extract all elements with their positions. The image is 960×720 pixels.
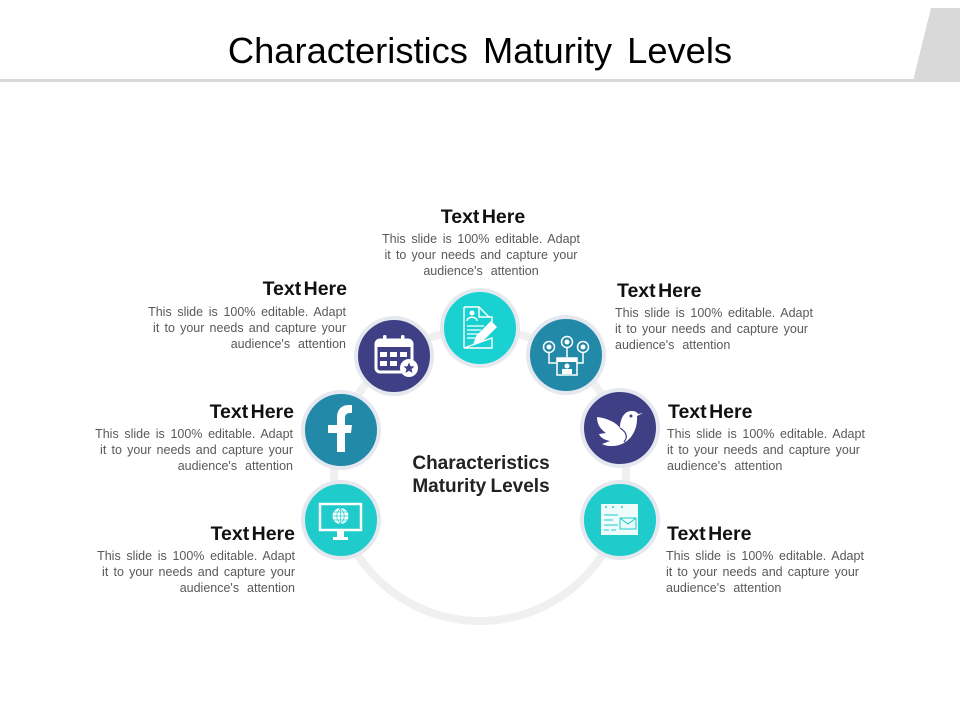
node: facebook bbox=[303, 392, 379, 468]
text: This slide is 100% editable. Adapt bbox=[666, 549, 864, 563]
text: Text Here bbox=[668, 401, 752, 423]
center label: Characteristics bbox=[412, 453, 550, 474]
text: it to your needs and capture your bbox=[102, 565, 295, 579]
text: audience's attention bbox=[178, 459, 293, 473]
text: This slide is 100% editable. Adapt bbox=[667, 427, 865, 441]
text block: lower left bbox=[97, 523, 295, 595]
text: This slide is 100% editable. Adapt bbox=[97, 549, 295, 563]
text: audience's attention bbox=[615, 338, 730, 352]
text: Text Here bbox=[210, 401, 294, 423]
node: mail bbox=[582, 482, 658, 558]
node: bird bbox=[582, 390, 658, 466]
text block: top bbox=[382, 206, 580, 278]
text: it to your needs and capture your bbox=[100, 443, 293, 457]
node: network people bbox=[528, 317, 604, 393]
text: audience's attention bbox=[231, 337, 346, 351]
text: This slide is 100% editable. Adapt bbox=[615, 306, 813, 320]
text: This slide is 100% editable. Adapt bbox=[95, 427, 293, 441]
text: Text Here bbox=[617, 280, 701, 302]
text block: lower right bbox=[666, 523, 864, 595]
text: Text Here bbox=[441, 206, 525, 228]
text block: middle left bbox=[95, 401, 294, 473]
center label bbox=[412, 453, 550, 497]
node: document bbox=[442, 290, 518, 366]
text block: upper left bbox=[148, 278, 347, 351]
text: audience's attention bbox=[666, 581, 781, 595]
text block: upper right bbox=[615, 280, 813, 352]
text: audience's attention bbox=[667, 459, 782, 473]
text: audience's attention bbox=[423, 264, 539, 278]
text: it to your needs and capture your bbox=[153, 321, 346, 335]
text: it to your needs and capture your bbox=[615, 322, 808, 336]
text: Text Here bbox=[667, 523, 751, 545]
connecting arc bbox=[334, 329, 626, 621]
text: it to your needs and capture your bbox=[666, 565, 859, 579]
text block: middle right bbox=[667, 401, 865, 473]
text: Text Here bbox=[263, 278, 347, 300]
header rule and corner tab bbox=[0, 8, 960, 82]
text: This slide is 100% editable. Adapt bbox=[148, 305, 346, 319]
node: calendar bbox=[356, 318, 432, 394]
node: monitor bbox=[303, 482, 379, 558]
center label: Maturity Levels bbox=[412, 476, 550, 497]
text: audience's attention bbox=[180, 581, 295, 595]
title: Characteristics Maturity Levels bbox=[228, 30, 732, 71]
text: Text Here bbox=[211, 523, 295, 545]
text: This slide is 100% editable. Adapt bbox=[382, 232, 580, 246]
text: it to your needs and capture your bbox=[667, 443, 860, 457]
text: it to your needs and capture your bbox=[385, 248, 577, 262]
